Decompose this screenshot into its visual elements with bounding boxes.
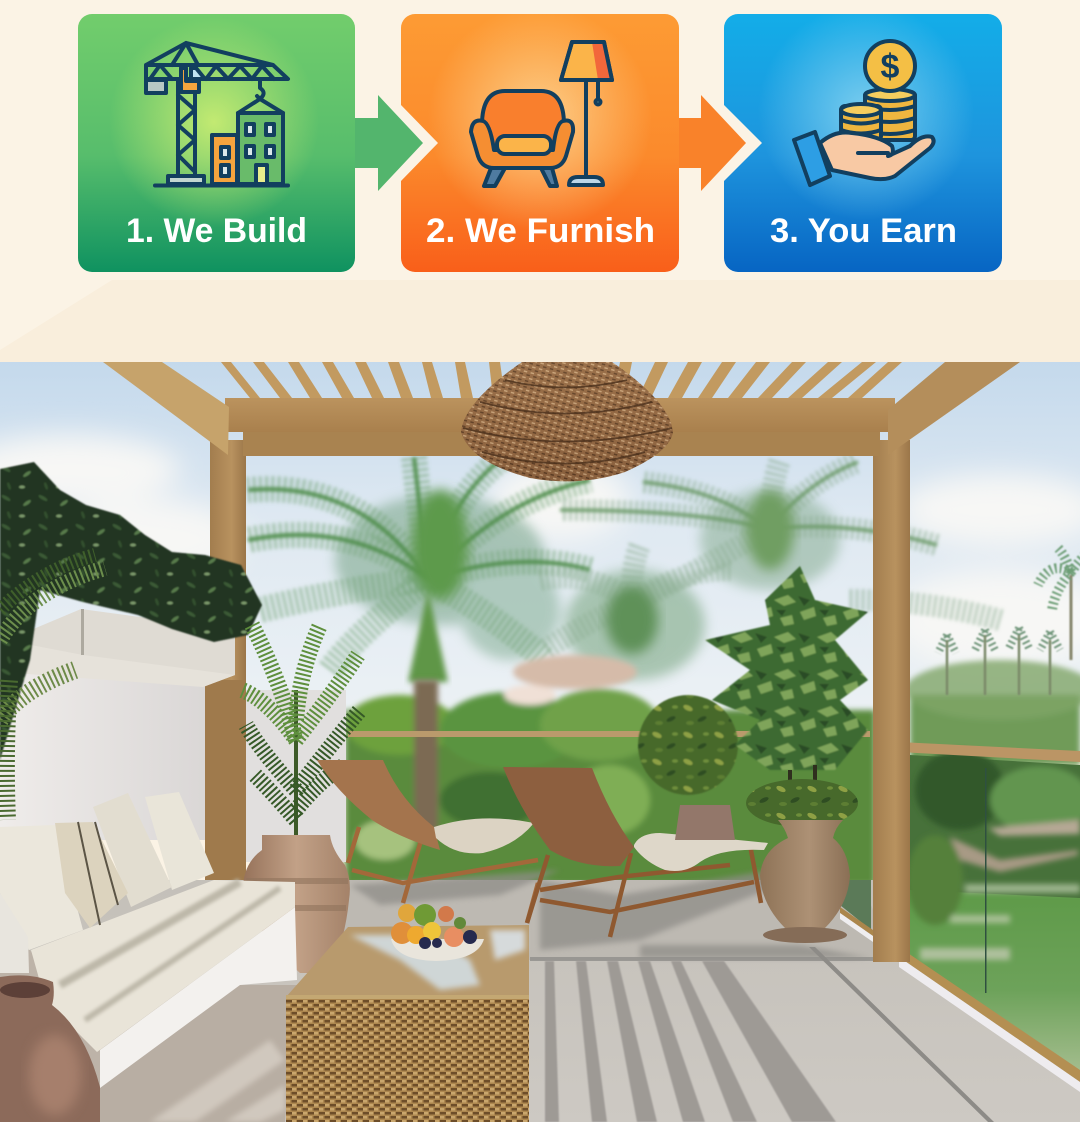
sofa with cushions xyxy=(0,792,297,1122)
cushions xyxy=(0,792,214,973)
sky with clouds xyxy=(0,362,1080,762)
hanging wicker lamp xyxy=(461,362,673,481)
label: 2. We Furnish: 2. We Furnish xyxy=(426,212,655,250)
pergola posts and beams xyxy=(103,362,1020,962)
far right palms xyxy=(938,548,1080,695)
arrow: build to furnish xyxy=(355,95,423,191)
cream header background xyxy=(0,0,1080,362)
distant palms and jungle xyxy=(248,457,1080,885)
terracotta urn foreground xyxy=(0,975,100,1122)
icon: hand holding coins xyxy=(794,41,934,185)
arrow: furnish to earn xyxy=(679,95,746,191)
icon: crane and buildings xyxy=(146,43,288,186)
white wall xyxy=(0,670,346,880)
foreground lounge chairs xyxy=(317,760,768,937)
panel: We Build xyxy=(78,14,355,272)
icon: armchair and floor lamp xyxy=(471,42,612,186)
hedge xyxy=(0,462,262,760)
fruit bowl xyxy=(391,904,484,961)
terrace floor xyxy=(0,870,1080,1122)
potted plant and urn right xyxy=(638,566,868,943)
white planter xyxy=(0,609,235,687)
palm fronds, right tree xyxy=(540,460,1000,650)
label: 3. You Earn: 3. You Earn xyxy=(770,212,957,250)
palm fronds, central tree xyxy=(248,457,590,670)
jungle mass xyxy=(345,655,1080,885)
panel: You Earn xyxy=(724,14,1002,272)
potted palm xyxy=(242,625,360,973)
glass balustrade and lawn xyxy=(348,731,1080,1092)
text: dollar sign: $ xyxy=(881,48,900,86)
wicker coffee table xyxy=(286,904,529,1122)
pergola slats xyxy=(221,362,902,398)
panel: terrace photo xyxy=(0,362,1080,1122)
label: 1. We Build: 1. We Build xyxy=(126,212,307,250)
left palm fronds xyxy=(0,555,105,820)
panel: We Furnish xyxy=(401,14,679,272)
